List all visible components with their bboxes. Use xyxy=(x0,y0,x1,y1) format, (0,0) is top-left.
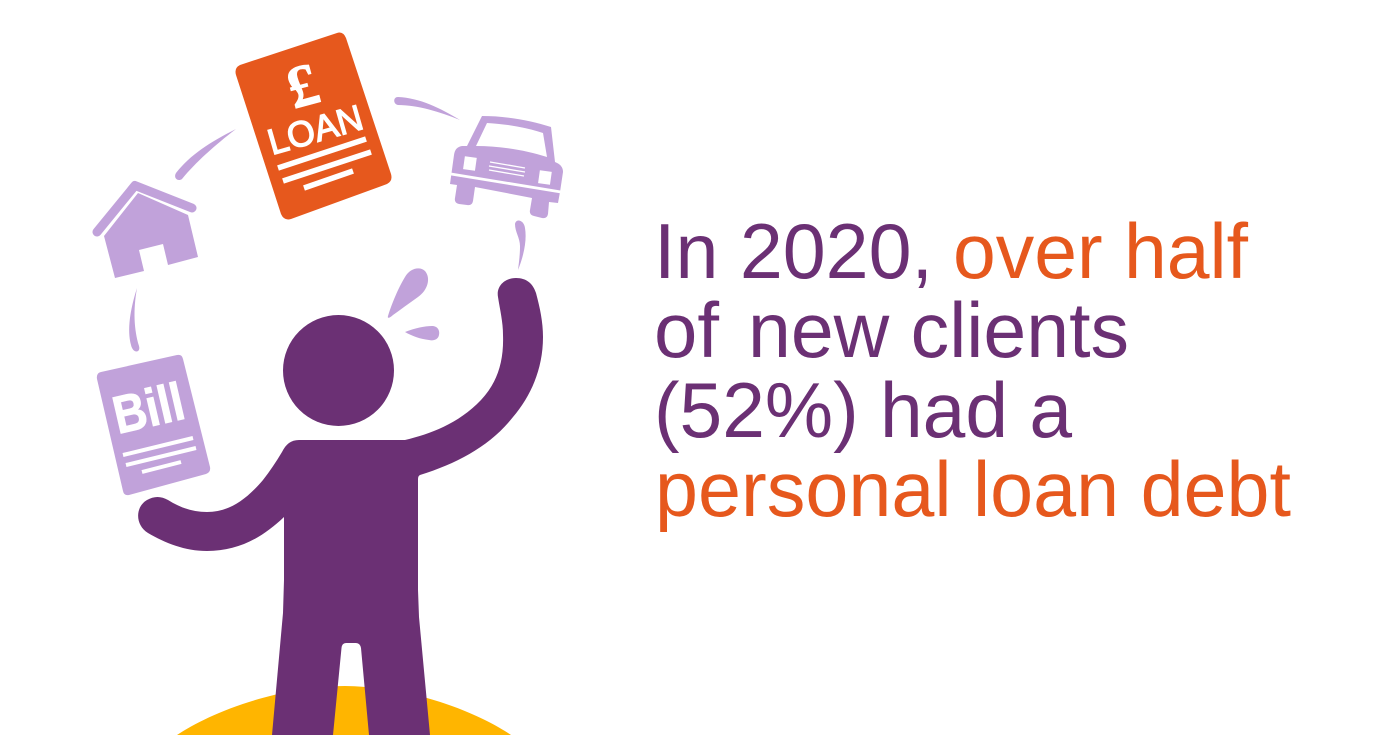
yellow ground semicircle xyxy=(177,686,511,735)
pound sign: £ xyxy=(280,50,326,121)
line 1: over half xyxy=(953,207,1248,295)
line 4: personal loan debt xyxy=(655,445,1291,533)
juggling motion swooshes xyxy=(129,97,526,352)
LOAN label: LOAN xyxy=(263,97,367,163)
line 2: of xyxy=(654,286,719,374)
line 3: (52%) had a xyxy=(654,366,1073,454)
Bill label: Bill xyxy=(107,372,190,446)
line 1 xyxy=(654,207,1248,295)
juggling person figure xyxy=(138,278,543,735)
body and arms xyxy=(138,278,543,735)
icon: bill document xyxy=(97,355,210,495)
sweat drops xyxy=(388,268,439,340)
head xyxy=(283,315,394,426)
icon: house xyxy=(97,186,198,278)
line 1: In 2020, xyxy=(654,207,933,295)
line 2: new clients xyxy=(748,286,1129,374)
icon: loan document xyxy=(236,33,392,219)
headline text xyxy=(654,207,1291,533)
icon: car xyxy=(450,116,563,218)
